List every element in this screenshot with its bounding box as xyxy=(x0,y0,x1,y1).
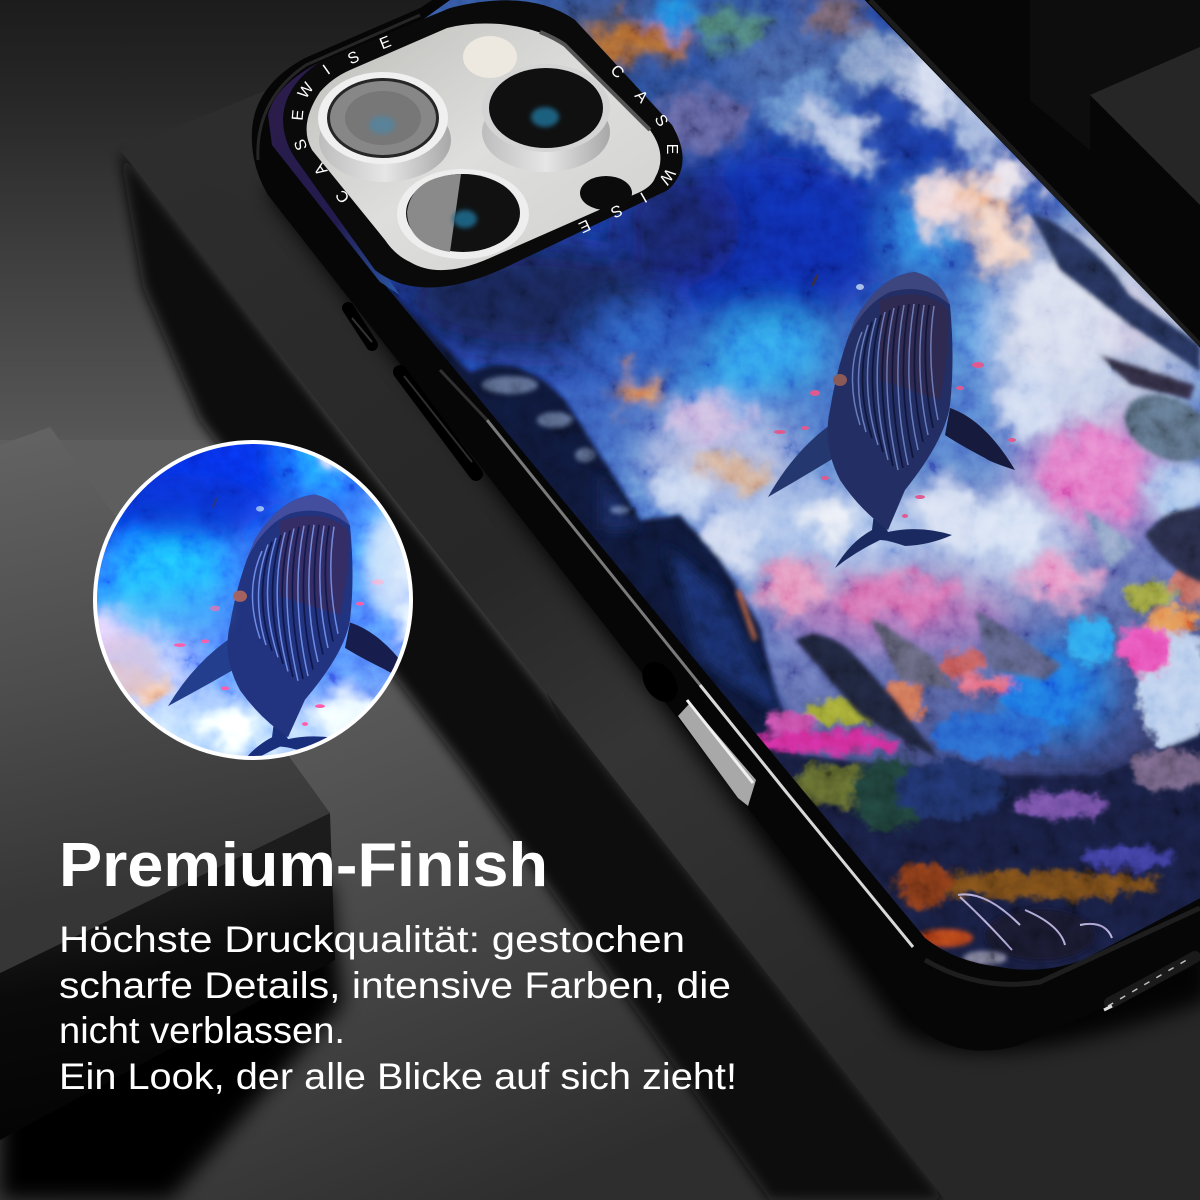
body text xyxy=(59,919,737,1097)
island band xyxy=(283,0,683,288)
body text: nicht verblassen. xyxy=(59,1010,345,1051)
brand text ring: S xyxy=(651,112,671,130)
brand text ring: S xyxy=(292,137,311,152)
artwork on the case: whale in cloudy ocean xyxy=(385,0,1200,970)
charging port xyxy=(1104,957,1195,1010)
brand text ring: W xyxy=(655,165,678,188)
side button recesses xyxy=(348,308,685,709)
brand text ring: C xyxy=(607,62,627,82)
body text: scharfe Details, intensive Farben, die xyxy=(59,965,731,1006)
brand text ring: A xyxy=(631,87,651,107)
brand text ring: E xyxy=(290,109,307,121)
phone shadow xyxy=(265,100,1200,1052)
brand text ring xyxy=(290,34,680,236)
body text: Ein Look, der alle Blicke auf sich zieht! xyxy=(59,1056,737,1097)
body text: Höchste Druckqualität: gestochen xyxy=(59,919,685,960)
silver side button xyxy=(678,700,756,806)
frame highlights xyxy=(258,0,1200,984)
brand text ring: E xyxy=(663,144,680,154)
brand text ring: C xyxy=(333,186,353,206)
brand text ring: W xyxy=(295,79,318,102)
phone case body xyxy=(252,0,1200,1051)
brand text ring: E xyxy=(576,216,593,236)
circular detail inset: whale close-up xyxy=(93,440,413,760)
brand text ring: S xyxy=(608,201,625,221)
artwork sliver beside the camera island xyxy=(268,60,400,295)
brand text ring: A xyxy=(311,160,331,178)
brand text ring: I xyxy=(637,188,649,205)
brand text ring: S xyxy=(345,48,362,68)
lens: top right xyxy=(482,64,610,172)
brand text ring: E xyxy=(377,34,394,53)
heading: Premium-Finish xyxy=(59,831,548,900)
camera window xyxy=(307,24,660,270)
lens: bottom xyxy=(397,169,529,259)
microphone hole xyxy=(580,176,632,210)
camera island xyxy=(283,0,683,288)
flash xyxy=(463,36,517,78)
brand text ring: I xyxy=(320,62,334,78)
lens: top left xyxy=(318,72,451,182)
